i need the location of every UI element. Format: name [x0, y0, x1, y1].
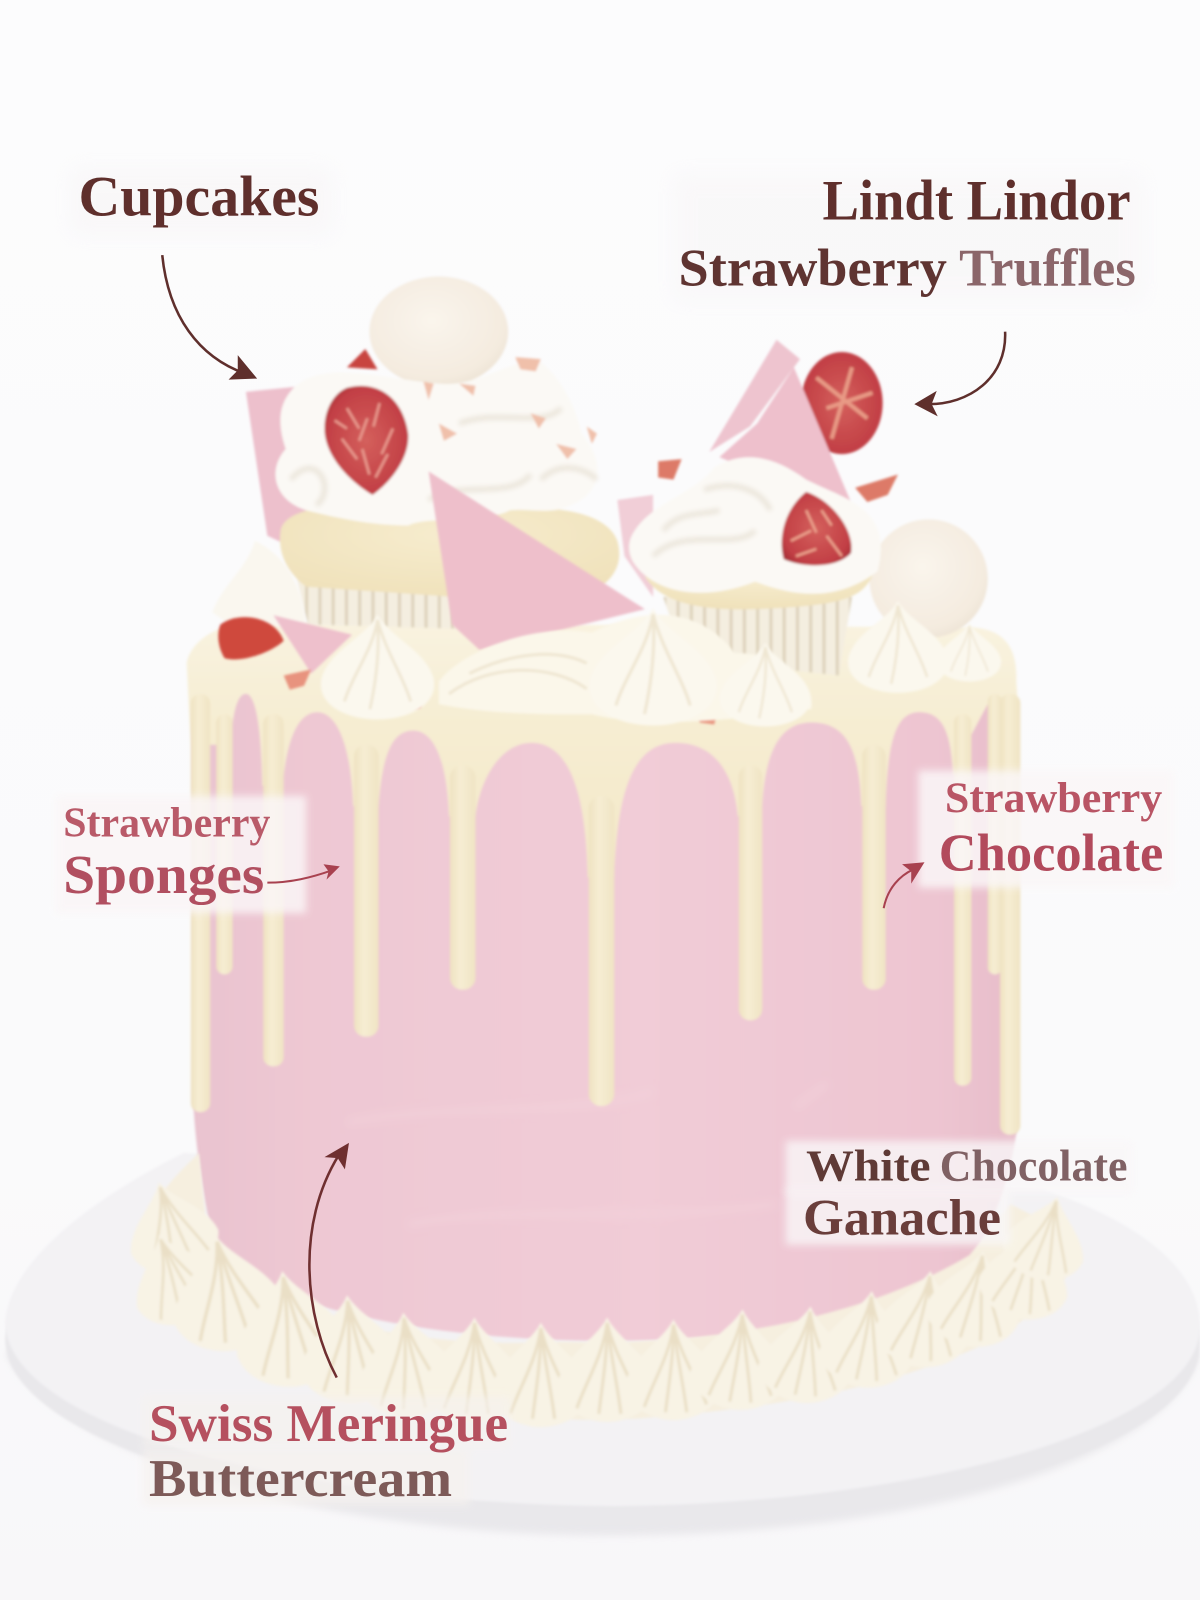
arrow: Cupcakes	[162, 255, 257, 380]
ganache top	[187, 622, 1018, 878]
drip 5	[450, 765, 476, 990]
label: Lindt Lindor Strawberry Truffles: Strawberry	[679, 240, 947, 298]
crumb	[658, 459, 898, 502]
truffle on left cupcake	[369, 277, 508, 387]
arrow: Chocolate	[884, 862, 924, 908]
label: Strawberry Sponges	[56, 796, 306, 913]
truffle	[869, 519, 988, 638]
label: Swiss Meringue Buttercream: Swiss Meringue	[149, 1395, 508, 1453]
arrow: Sponges	[267, 864, 340, 883]
label: White Chocolate Ganache: White	[806, 1141, 931, 1191]
strawberry behind truffle	[347, 349, 378, 369]
piped meringue border	[115, 1153, 1098, 1427]
strawberry pieces and shard on cake top	[218, 615, 718, 724]
drip centre	[589, 796, 614, 1106]
sponge dome	[645, 566, 876, 609]
drip 8	[862, 745, 886, 990]
pink chocolate shards	[709, 340, 800, 452]
pink chocolate shard left	[246, 386, 308, 546]
label: White Chocolate Ganache	[786, 1141, 1133, 1247]
label: Swiss Meringue Buttercream	[143, 1395, 510, 1508]
drip 9	[954, 714, 971, 1086]
label: Lindt Lindor Strawberry Truffles	[673, 169, 1143, 301]
central pink chocolate shard	[429, 471, 645, 650]
cupcake paper liner	[294, 566, 456, 629]
whipped cream behind left cupcake	[212, 541, 306, 628]
frosting	[275, 362, 597, 526]
strawberry on frosting	[324, 386, 408, 495]
label: Cupcakes: Cupcakes	[79, 165, 319, 228]
label: Swiss Meringue Buttercream: Buttercream	[149, 1450, 452, 1508]
white chocolate ganache and drips	[187, 622, 1020, 1135]
left cupcake	[212, 277, 619, 629]
cake board plate	[5, 1153, 1200, 1536]
drip far left	[191, 694, 210, 1112]
drip 4	[354, 745, 379, 1037]
crumbs	[423, 357, 597, 459]
drip left 2	[216, 714, 233, 974]
label: Strawberry Chocolate	[918, 770, 1173, 888]
label: Strawberry Chocolate: Chocolate	[939, 824, 1163, 882]
drip 10	[988, 694, 1002, 974]
cake body with pink buttercream	[192, 673, 1016, 1341]
label: White Chocolate Ganache: Chocolate	[940, 1141, 1128, 1191]
label: Lindt Lindor Strawberry Truffles: Truffles	[959, 240, 1136, 298]
frosting	[629, 457, 881, 594]
arrow: Truffles	[914, 332, 1005, 416]
whipped cream rosettes on cake top	[321, 601, 1001, 727]
drip left 3	[263, 714, 284, 1066]
drip 7	[739, 765, 762, 1020]
paper liner	[663, 597, 852, 676]
right cupcake	[617, 340, 988, 676]
strawberry behind shards	[801, 352, 883, 454]
label: Strawberry Sponges: Sponges	[63, 844, 264, 905]
cupcake sponge dome	[280, 505, 619, 602]
label: Lindt Lindor Strawberry Truffles: Lindt Lindor	[822, 169, 1131, 232]
strawberry	[782, 492, 851, 565]
label: Strawberry Chocolate: Strawberry	[945, 775, 1162, 822]
label: Strawberry Sponges: Strawberry	[63, 801, 270, 847]
drip far right	[1000, 694, 1020, 1135]
label: White Chocolate Ganache: Ganache	[803, 1191, 1001, 1247]
arrow: Buttercream	[309, 1143, 349, 1378]
